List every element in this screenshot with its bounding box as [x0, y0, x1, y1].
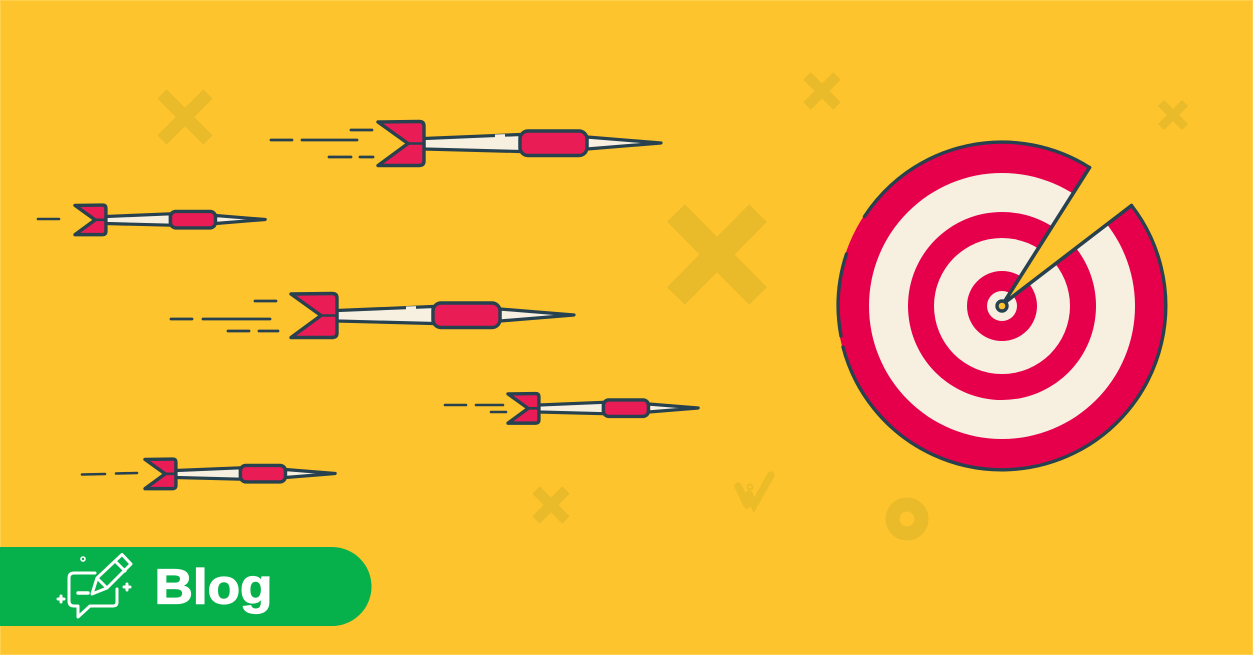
dart 3 with speed lines	[171, 294, 574, 338]
dart 4 with speed lines	[445, 394, 698, 423]
dart 2 with speed line	[38, 205, 265, 235]
target centre	[997, 301, 1007, 311]
mark: x top right	[1161, 103, 1185, 127]
mark: x top centre	[807, 76, 837, 106]
decorative faded marks	[162, 76, 1185, 534]
target	[837, 141, 1167, 471]
target rings	[837, 141, 1167, 471]
blog label: Blog	[154, 560, 272, 614]
mark: large x centre	[676, 213, 758, 296]
mark: x bottom centre	[536, 490, 566, 520]
target missing wedge	[1003, 160, 1145, 304]
target wedge outline	[1003, 168, 1132, 304]
dart 1 with speed lines	[271, 122, 661, 166]
mark: logo	[738, 475, 771, 505]
blog badge	[0, 547, 372, 626]
dart 5 with speed lines	[82, 459, 335, 489]
green pill	[0, 547, 372, 626]
mark: ring	[892, 504, 922, 534]
mark: x top left	[162, 94, 208, 140]
icon: chat bubble and pencil	[58, 554, 131, 617]
target outer outline	[838, 142, 1166, 470]
